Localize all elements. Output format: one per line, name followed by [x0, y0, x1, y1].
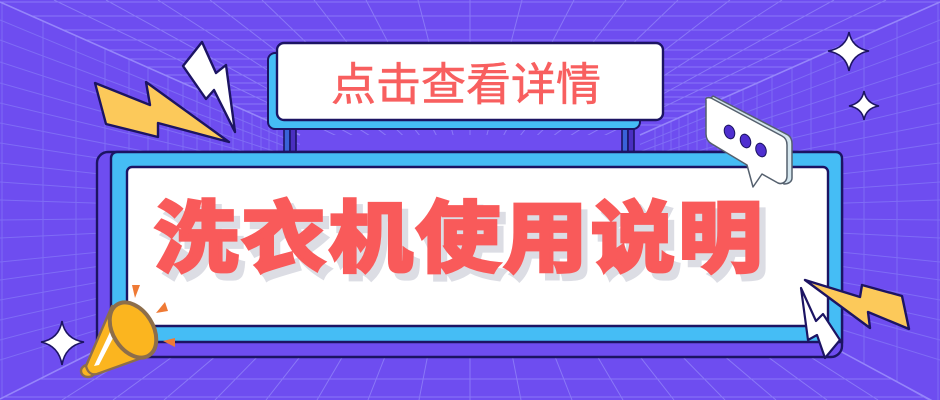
sign white face — [277, 43, 663, 120]
icon: speech bubble — [706, 96, 792, 187]
icon: megaphone — [81, 285, 175, 377]
icon: sparkle middle — [849, 91, 879, 120]
top sign board — [268, 43, 663, 153]
board blue frame — [111, 152, 842, 342]
board white face — [127, 167, 828, 326]
sign text: 点击查看详情 — [331, 59, 601, 110]
icon: sparkle top — [828, 32, 869, 71]
board back outline — [97, 152, 842, 357]
sign blue backing — [268, 53, 640, 129]
icon: yellow lightning right — [805, 280, 909, 329]
icon: yellow lightning left — [95, 82, 229, 142]
icon: white lightning right — [801, 288, 840, 358]
icon: megaphone sound ticks — [132, 285, 175, 347]
main title board — [97, 152, 842, 357]
title: 洗衣机使用说明 — [160, 203, 772, 289]
title: 洗衣机使用说明 — [154, 196, 766, 282]
icon: white lightning left — [183, 42, 235, 132]
icon: sparkle left — [41, 321, 84, 365]
sign posts — [284, 125, 634, 153]
